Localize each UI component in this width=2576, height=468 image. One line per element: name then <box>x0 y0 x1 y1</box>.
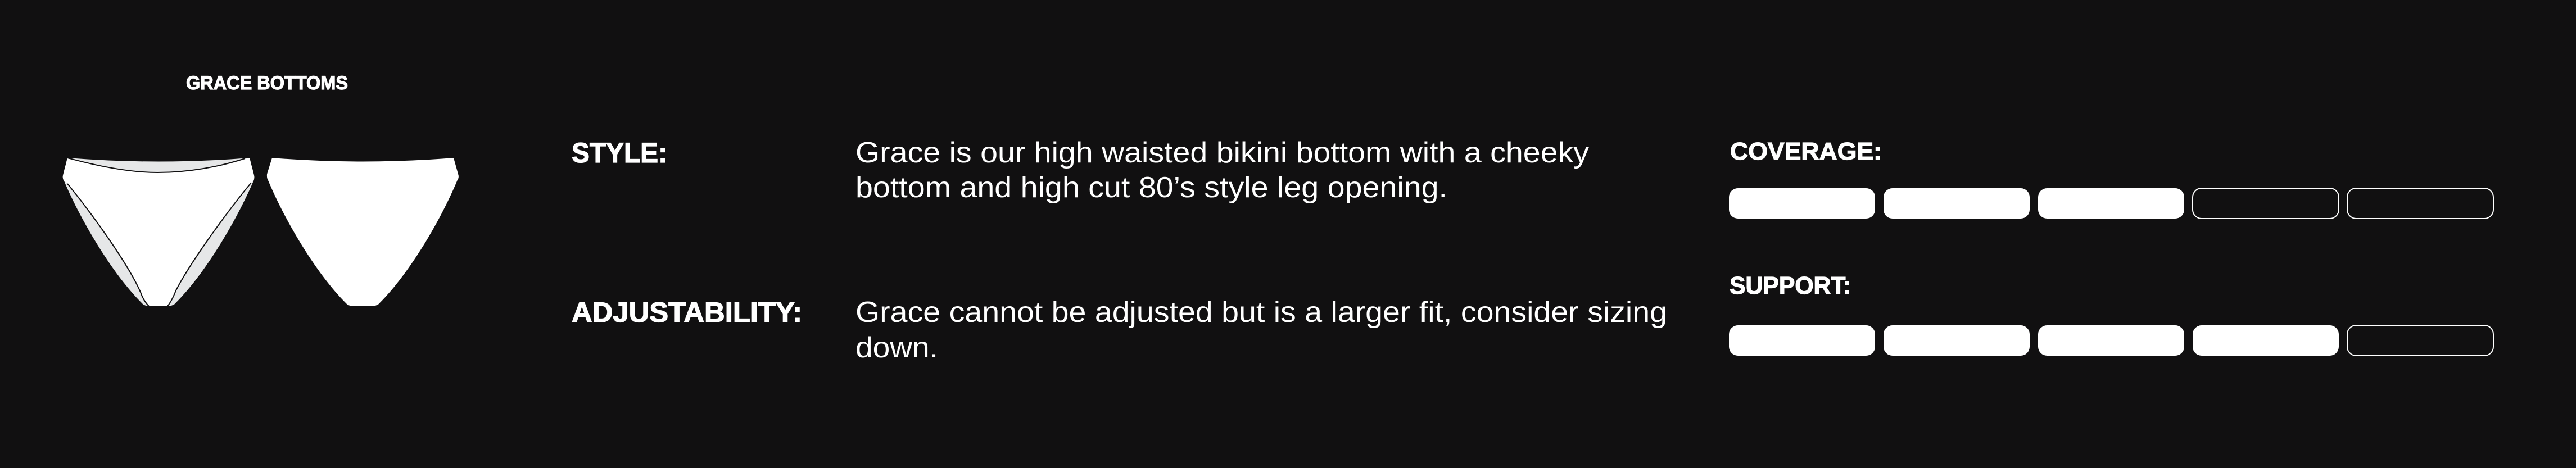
text: style description: Grace is our high waisted bikini bottom with a cheeky <box>855 137 1589 169</box>
label: adjustability: ADJUSTABILITY: <box>572 297 802 328</box>
title: GRACE BOTTOMS <box>186 72 348 94</box>
text: adjustability description: Grace cannot be adjusted but is a larger fit, consider sizing <box>855 296 1667 329</box>
text: adjustability description: down. <box>855 331 938 364</box>
icon: back view of bottoms <box>267 158 459 306</box>
text: adjustability description <box>855 296 1667 364</box>
rating: coverage 3 of 5 <box>1729 188 2493 219</box>
label: coverage: COVERAGE: <box>1730 138 1882 165</box>
rating: support 4 of 5 <box>1729 325 2493 356</box>
label: style: STYLE: <box>572 137 667 169</box>
text: style description <box>855 137 1589 204</box>
label: support: SUPPORT: <box>1730 272 1851 299</box>
icon: front view of bottoms <box>63 158 254 306</box>
text: style description: bottom and high cut 80’s style leg opening. <box>855 171 1447 204</box>
